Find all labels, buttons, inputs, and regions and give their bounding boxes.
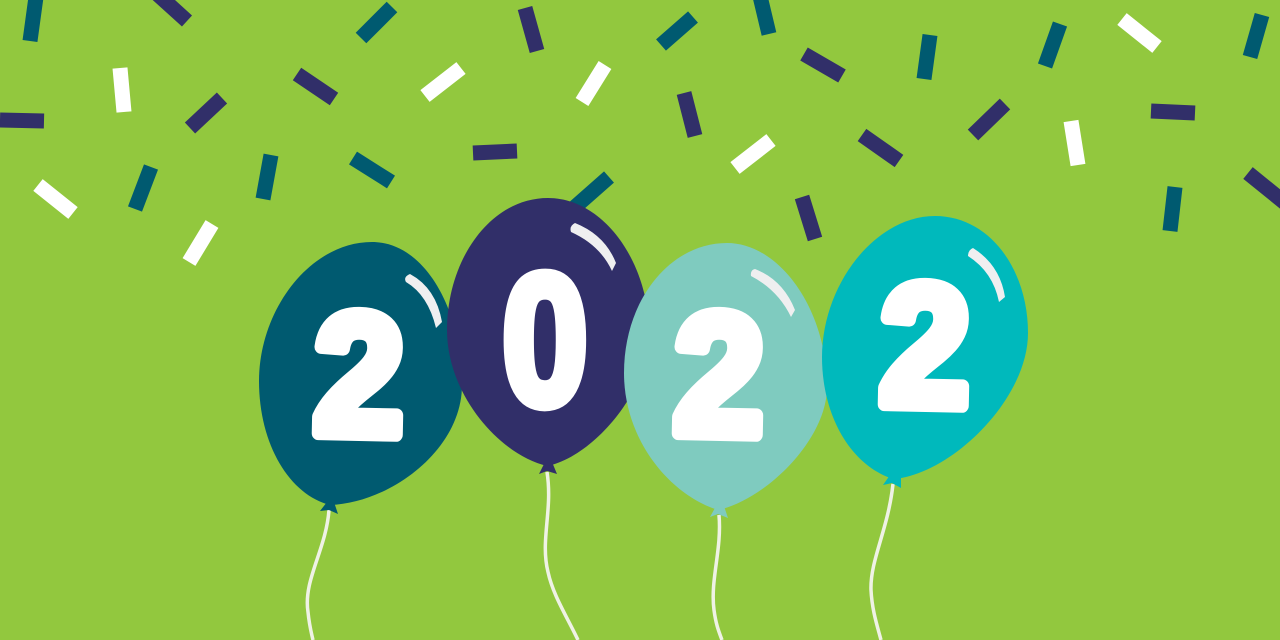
balloon 4: digit 2 xyxy=(822,216,1028,640)
balloon 1: digit 2: 2 xyxy=(312,278,406,472)
balloon 4: digit 2: 2 xyxy=(878,249,972,443)
balloon 2: digit 0 xyxy=(447,198,649,640)
balloon 3: digit 2: 2 xyxy=(672,278,766,472)
balloon 2: digit 0: 0 xyxy=(502,236,588,444)
balloon 3: digit 2 xyxy=(624,243,827,640)
balloon 1: digit 2 xyxy=(259,242,462,640)
confetti xyxy=(0,0,1280,262)
